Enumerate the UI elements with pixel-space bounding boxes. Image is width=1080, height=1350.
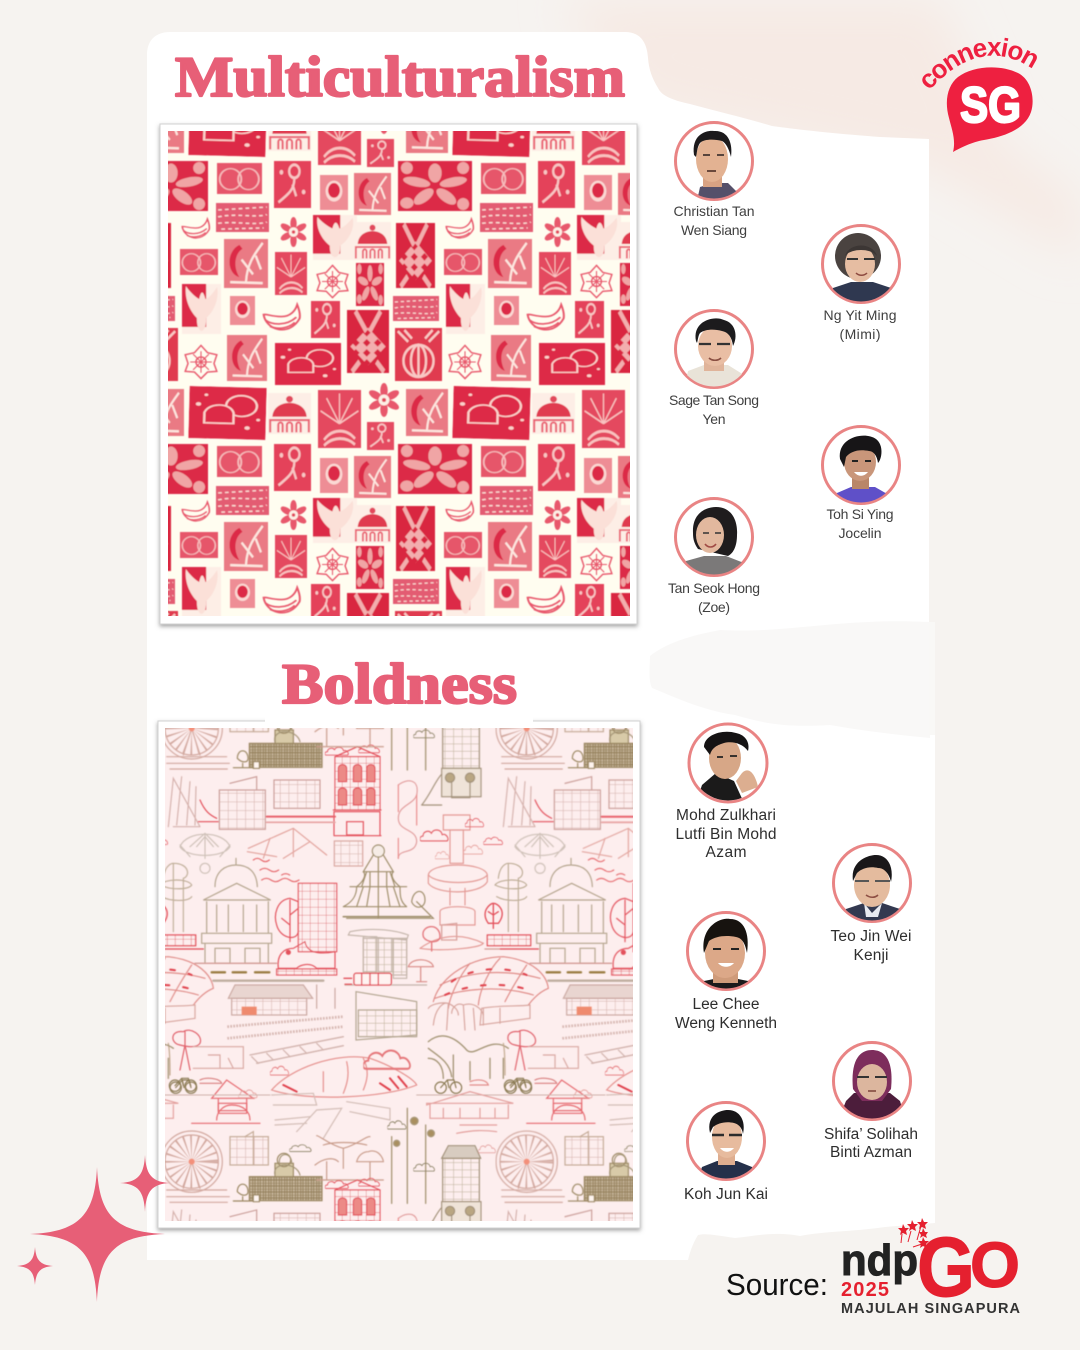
name: Lee Chee Weng Kenneth: Lee Chee	[692, 996, 760, 1013]
avatar: Koh Jun Kai	[688, 1102, 764, 1181]
name: Tan Seok Hong: (Zoe)	[698, 599, 730, 615]
avatar: Teo Jin Wei Kenji	[834, 844, 910, 923]
avatar: Lee Chee Weng Kenneth	[688, 912, 764, 991]
name: Christian Tan Wen Siang: Christian Tan	[674, 203, 754, 219]
avatar: Mohd Zulkhari	[689, 724, 767, 803]
name: Christian Tan Wen Siang	[674, 203, 754, 238]
name: Sage Tan Song Yen: Sage Tan Song	[669, 392, 759, 408]
name: Mohd Zulkhari Lutfi Bin Mohd Azam	[676, 807, 776, 861]
name: Toh Si Ying Jocelin: Toh Si Ying	[826, 506, 894, 522]
name: Lee Chee Weng Kenneth	[675, 996, 777, 1032]
sparkle: lower left	[17, 1247, 53, 1285]
logo: NDP GO 2025: O	[970, 1229, 1020, 1301]
name: Toh Si Ying Jocelin: Jocelin	[838, 525, 882, 541]
logo: NDP GO 2025: G	[917, 1220, 975, 1314]
name: Mohd Zulkhari Lutfi Bin Mohd Azam: Lutfi Bin Mohd	[676, 826, 776, 843]
name: Toh Si Ying Jocelin	[826, 506, 894, 541]
name: Tan Seok Hong	[668, 580, 760, 615]
avatar: Toh Si Ying Jocelin	[822, 426, 900, 505]
name: Mohd Zulkhari Lutfi Bin Mohd Azam: Mohd Zulkhari	[676, 807, 776, 824]
title: Boldness: Boldness	[282, 653, 517, 716]
logo: connexion SG	[922, 38, 1037, 152]
panel: Multiculturalism pattern artwork	[156, 122, 640, 630]
avatar: Shifa' Solihah Binti Azman	[834, 1042, 910, 1121]
avatar: Sage Tan Song Yen	[676, 310, 752, 389]
sparkle: upper right	[120, 1155, 170, 1212]
logo: connexion SG: connexion	[922, 38, 1037, 88]
logo: connexion SG: SG	[960, 77, 1021, 133]
avatar: Christian Tan Wen Siang	[676, 122, 752, 201]
name: Shifa' Solihah Binti Azman: Shifa’ Solihah	[824, 1126, 918, 1143]
name: Sage Tan Song Yen	[669, 392, 759, 427]
name: Sage Tan Song Yen: Yen	[702, 411, 726, 427]
name: Ng Yit Ming: (Mimi)	[840, 326, 880, 342]
title: Multiculturalism: Multiculturalism	[175, 46, 625, 109]
source label: Source:	[726, 1267, 828, 1302]
name: Shifa' Solihah Binti Azman: Binti Azman	[830, 1144, 912, 1161]
white torn paper panel	[147, 32, 935, 1260]
logo: NDP GO 2025: 2025	[841, 1279, 889, 1301]
panel: Boldness pattern artwork	[154, 720, 644, 1234]
name: Teo Jin Wei Kenji	[830, 928, 912, 964]
name: Tan Seok Hong: Tan Seok Hong	[668, 580, 760, 596]
sparkle: large	[30, 1167, 165, 1302]
name: Ng Yit Ming: Ng Yit Ming	[824, 307, 896, 323]
avatar: Ng Yit Ming	[822, 226, 900, 304]
name: Koh Jun Kai: Koh Jun Kai	[684, 1186, 768, 1203]
name: Mohd Zulkhari Lutfi Bin Mohd Azam: Azam	[706, 844, 746, 861]
name: Lee Chee Weng Kenneth: Weng Kenneth	[675, 1015, 777, 1032]
name: Teo Jin Wei Kenji: Teo Jin Wei	[830, 928, 912, 945]
avatar: Tan Seok Hong	[676, 498, 752, 577]
logo: NDP GO 2025	[841, 1218, 1021, 1317]
logo: NDP GO 2025: ndp	[841, 1236, 918, 1285]
name: Teo Jin Wei Kenji: Kenji	[854, 947, 888, 964]
name: Christian Tan Wen Siang: Wen Siang	[681, 222, 747, 238]
name: Shifa' Solihah Binti Azman	[824, 1126, 918, 1161]
name: Ng Yit Ming	[824, 307, 896, 342]
logo: NDP GO 2025: MAJULAH SINGAPURA	[841, 1301, 1021, 1317]
